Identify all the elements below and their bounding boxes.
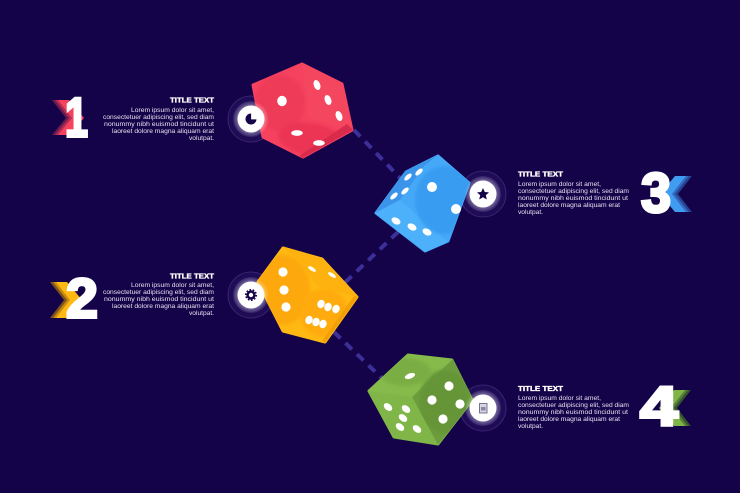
text block 2: volutpat. bbox=[189, 311, 214, 317]
text block 3: nonummy nibh euismod tincidunt ut bbox=[518, 196, 628, 202]
yellow die bbox=[254, 247, 358, 343]
dashed connectors bbox=[334, 130, 402, 388]
number 2 with yellow chevrons: 2 bbox=[66, 266, 98, 330]
text block 4: volutpat. bbox=[518, 424, 543, 430]
red die bbox=[253, 63, 353, 159]
icon: star badge bbox=[465, 176, 501, 212]
text block 4: consectetuer adipiscing elit, sed diam bbox=[518, 403, 629, 409]
text block 1: TITLE TEXT bbox=[170, 98, 215, 104]
text block 3: consectetuer adipiscing elit, sed diam bbox=[518, 189, 629, 195]
text block 4: laoreet dolore magna aliquam erat bbox=[518, 417, 620, 423]
number 3 with blue chevrons bbox=[641, 161, 692, 224]
number 4 with green chevrons: 4 bbox=[640, 374, 678, 438]
text block 3: laoreet dolore magna aliquam erat bbox=[518, 203, 620, 209]
number 3 with blue chevrons: 3 bbox=[641, 161, 671, 224]
number 1 with red chevrons bbox=[52, 86, 88, 148]
icon: gear badge bbox=[233, 277, 269, 313]
text block 4: Lorem ipsum dolor sit amet, bbox=[518, 396, 601, 402]
text block 3 bbox=[518, 172, 629, 216]
number 1 with red chevrons: 1 bbox=[65, 86, 88, 148]
text block 2: laoreet dolore magna aliquam erat bbox=[112, 304, 214, 310]
text block 1: consectetuer adipiscing elit, sed diam bbox=[103, 115, 214, 121]
text block 4: nonummy nibh euismod tincidunt ut bbox=[518, 410, 628, 416]
number 4 with green chevrons bbox=[640, 374, 691, 438]
text block 3: Lorem ipsum dolor sit amet, bbox=[518, 182, 601, 188]
text block 4: TITLE TEXT bbox=[518, 386, 564, 393]
text block 2: TITLE TEXT bbox=[170, 274, 215, 280]
green die bbox=[368, 354, 473, 445]
text block 2: consectetuer adipiscing elit, sed diam bbox=[103, 290, 214, 296]
text block 2: Lorem ipsum dolor sit amet, bbox=[131, 283, 214, 289]
text block 2 bbox=[103, 274, 215, 317]
text block 1: nonummy nibh euismod tincidunt ut bbox=[104, 122, 214, 128]
text block 4 bbox=[518, 386, 629, 430]
number 2 with yellow chevrons bbox=[50, 266, 98, 330]
icon: pie chart badge bbox=[233, 101, 269, 137]
text block 1: volutpat. bbox=[189, 136, 214, 142]
text block 1: Lorem ipsum dolor sit amet, bbox=[131, 108, 214, 114]
text block 1 bbox=[103, 98, 215, 142]
text block 1: laoreet dolore magna aliquam erat bbox=[112, 129, 214, 135]
icon: document badge bbox=[465, 390, 501, 426]
blue die bbox=[375, 155, 475, 252]
marker rings bbox=[228, 96, 506, 431]
text block 3: volutpat. bbox=[518, 210, 543, 216]
text block 3: TITLE TEXT bbox=[518, 172, 564, 178]
text block 2: nonummy nibh euismod tincidunt ut bbox=[104, 297, 214, 303]
